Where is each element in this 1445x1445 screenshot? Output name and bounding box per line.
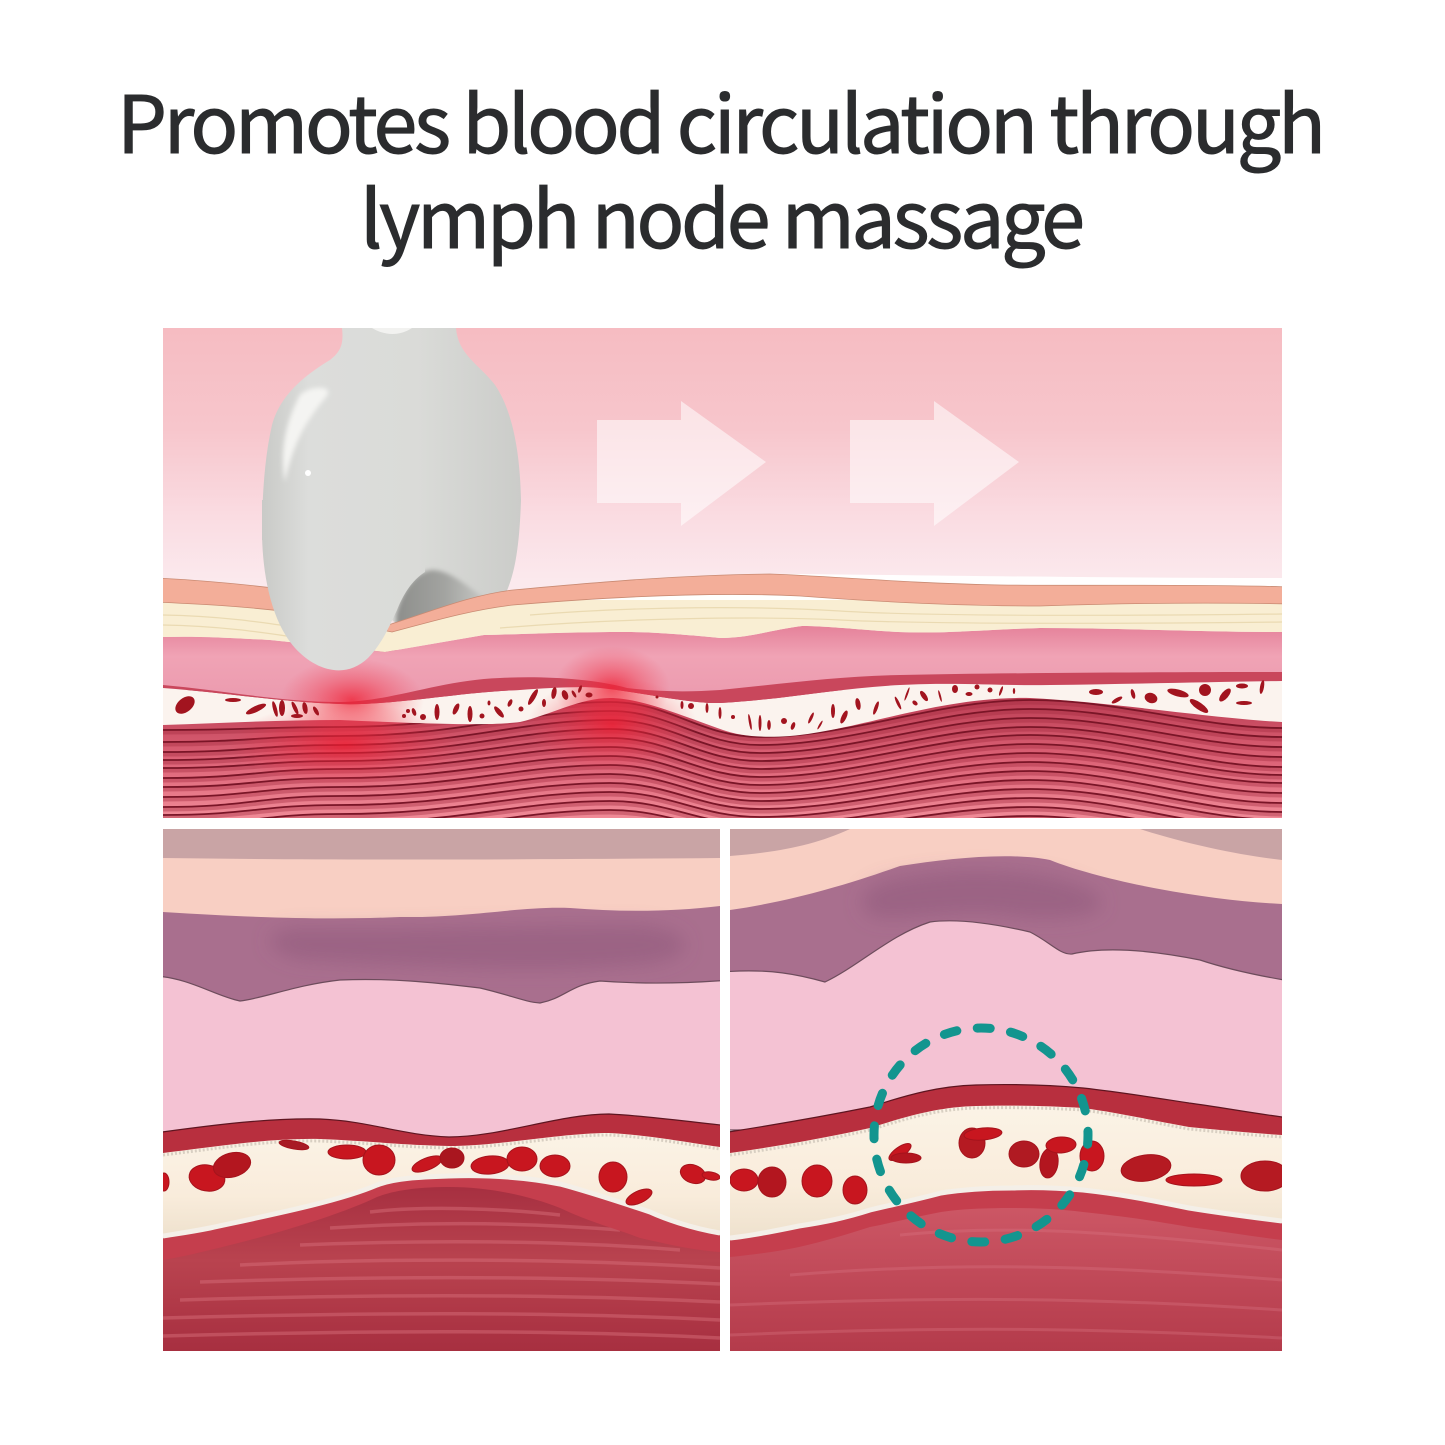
massage device body (262, 328, 521, 630)
massage device front lobe (262, 500, 425, 670)
title: Promotes blood circulation through (117, 61, 1326, 176)
vessel upper lining (163, 1135, 720, 1155)
panel: vessel after massage (722, 829, 1290, 1351)
vessel lining (730, 1188, 1282, 1238)
red pressure glow (242, 651, 690, 780)
muscle fibres (730, 1230, 1282, 1338)
pink fat layer (155, 976, 730, 1140)
lower vessel wall (730, 1190, 1282, 1257)
vessel upper lining (730, 1108, 1282, 1155)
panel: vessel before massage (155, 829, 730, 1351)
muscle fibre lines (163, 699, 1282, 818)
skin surface (163, 858, 720, 918)
lower vessel wall (163, 1178, 720, 1260)
skin surface (730, 829, 1282, 910)
title: lymph node massage (360, 156, 1085, 271)
vessel upper wall (163, 650, 1282, 704)
panel: massage on skin cross-section (155, 328, 1290, 852)
red blood cells (159, 1138, 721, 1208)
vessel lumen (163, 681, 1282, 737)
muscle (730, 1208, 1282, 1351)
upper vessel wall (730, 1084, 1282, 1153)
red blood cells (730, 1126, 1289, 1204)
skin outer layer (155, 574, 1290, 632)
vessel lining (163, 1176, 720, 1236)
vessel lumen (730, 1106, 1282, 1240)
muscle layer (163, 690, 1282, 818)
upper vessel wall (163, 1113, 720, 1153)
arrow: first direction arrow (597, 401, 766, 526)
skin cream layer (163, 594, 1282, 652)
purple tissue band (163, 906, 720, 1010)
purple tissue band (730, 856, 1282, 982)
vessel lumen (163, 1133, 720, 1238)
dermis layer (163, 626, 1282, 702)
muscle fibres (163, 1208, 720, 1338)
skin white highlight (588, 574, 1282, 600)
muscle (163, 1170, 720, 1351)
red blood cells in top vessel (172, 680, 1265, 731)
title (117, 61, 1326, 271)
arrow: second direction arrow (850, 401, 1019, 526)
highlight circle: dashed teal (870, 1024, 1092, 1246)
pink fat layer (722, 921, 1290, 1130)
